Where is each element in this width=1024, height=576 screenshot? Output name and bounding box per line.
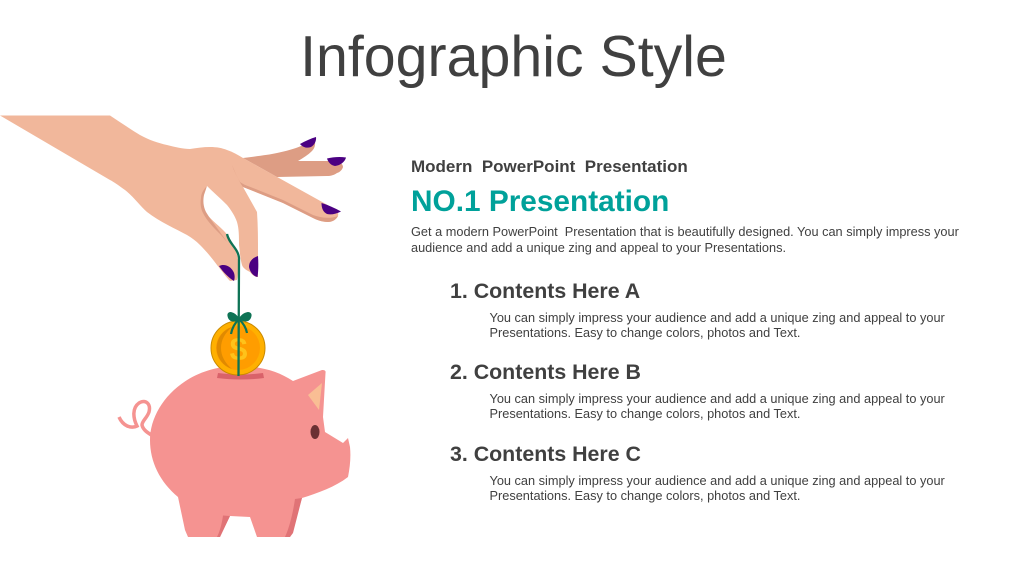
intro text: Get a modern PowerPoint Presentation that is beautifully designed. You can simply impress your bbox=[411, 224, 959, 239]
item heading A: 1. Contents Here A bbox=[450, 279, 640, 303]
subheading: Modern PowerPoint Presentation bbox=[411, 157, 688, 176]
item heading C: 3. Contents Here C bbox=[450, 442, 641, 466]
icon: pig bbox=[150, 366, 350, 537]
item: contents B bbox=[450, 360, 945, 421]
icon: back fingers bbox=[243, 137, 346, 177]
icon: string and bow bbox=[227, 234, 251, 376]
item text B bbox=[490, 391, 945, 421]
intro text bbox=[411, 224, 959, 255]
icon: coin: $ bbox=[230, 331, 248, 367]
item text B: Presentations. Easy to change colors, photos and Text. bbox=[490, 406, 800, 421]
icon: coin bbox=[211, 321, 265, 375]
item text C: You can simply impress your audience and add a unique zing and appeal to your bbox=[490, 473, 945, 488]
item: contents A bbox=[450, 279, 945, 340]
illustration: hand dropping coin into piggy bank bbox=[0, 116, 350, 537]
item text A bbox=[490, 310, 945, 340]
item text C: Presentations. Easy to change colors, photos and Text. bbox=[490, 488, 800, 503]
item heading B: 2. Contents Here B bbox=[450, 360, 641, 384]
intro text: audience and add a unique zing and appeal to your Presentations. bbox=[411, 240, 786, 255]
item text A: Presentations. Easy to change colors, photos and Text. bbox=[490, 325, 800, 340]
item text A: You can simply impress your audience and add a unique zing and appeal to your bbox=[490, 310, 945, 325]
title: Infographic Style bbox=[300, 25, 727, 89]
icon: nails bbox=[219, 203, 341, 281]
item text C bbox=[490, 473, 945, 503]
heading: NO.1 Presentation: NO.1 Presentation bbox=[411, 185, 669, 218]
icon: pig tail bbox=[119, 402, 153, 436]
item text B: You can simply impress your audience and add a unique zing and appeal to your bbox=[490, 391, 945, 406]
item: contents C bbox=[450, 442, 945, 503]
icon: hand bbox=[0, 116, 341, 281]
